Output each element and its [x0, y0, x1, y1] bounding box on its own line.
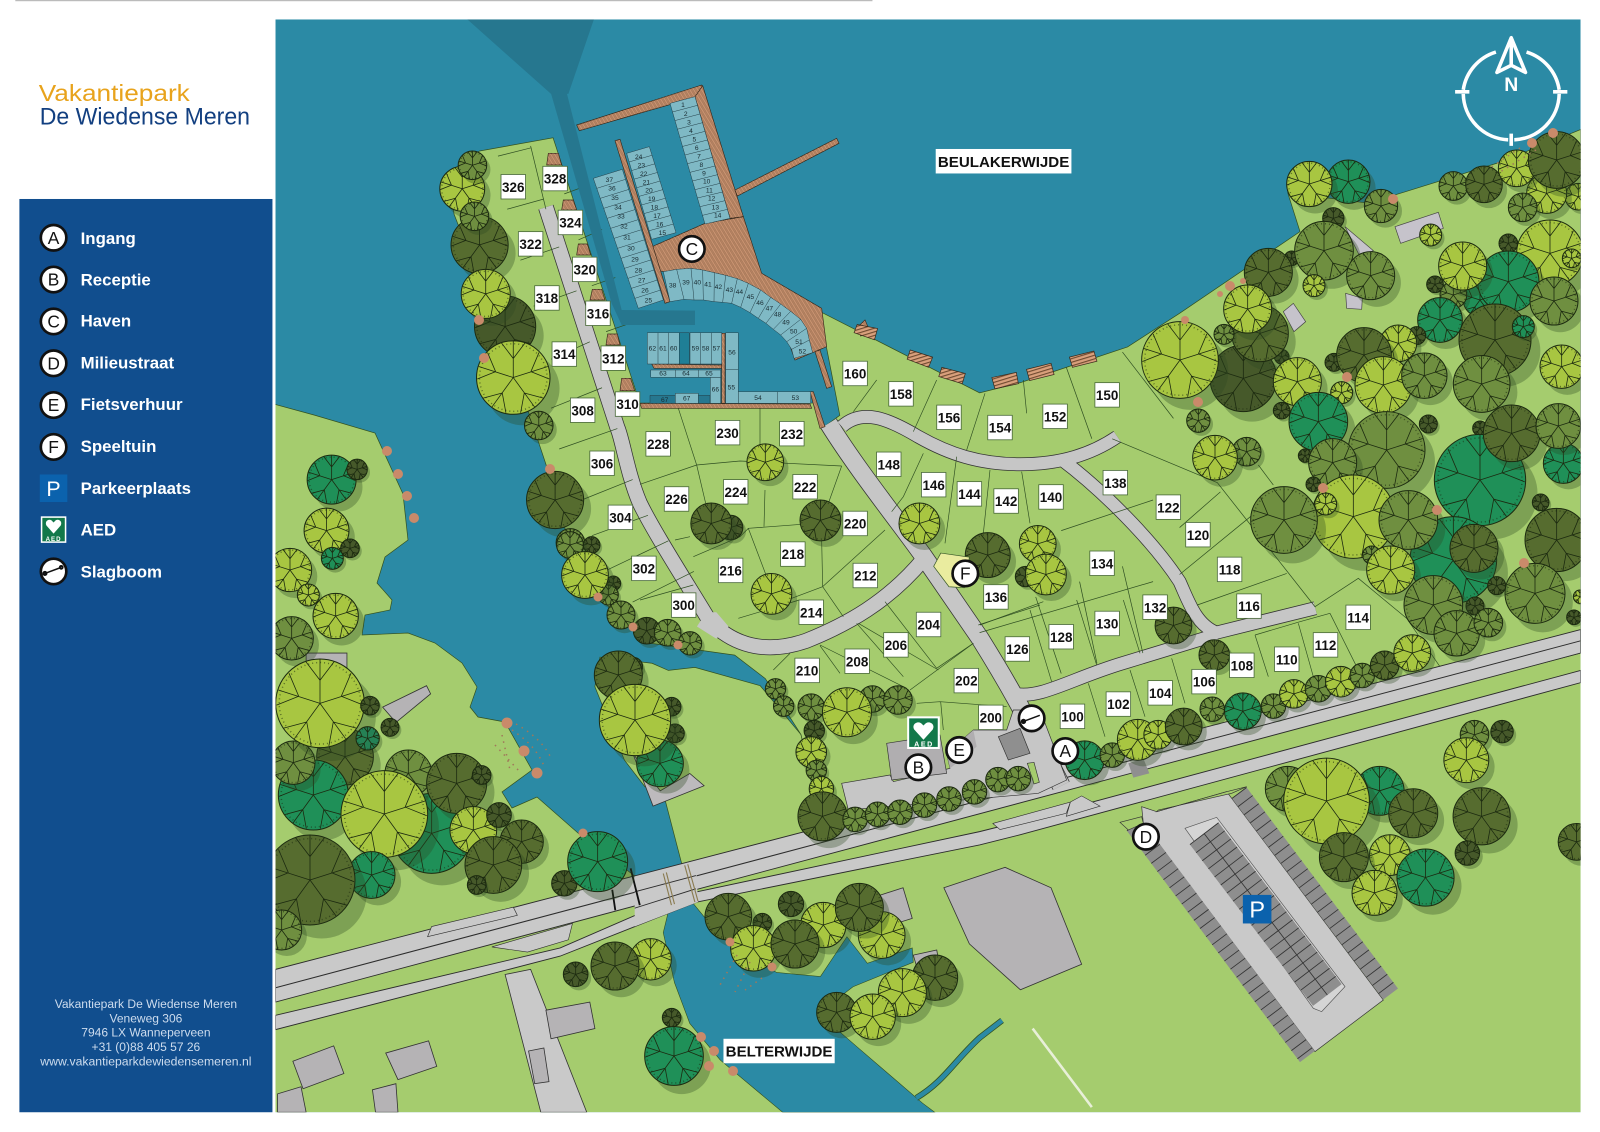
berth numbers: 67	[661, 397, 669, 404]
parking bays: north row	[1239, 793, 1391, 994]
lot numbers: 112	[1315, 638, 1336, 653]
building: large hall	[944, 867, 1082, 990]
side road and field buildings	[278, 653, 1082, 1112]
berth numbers: 51	[795, 339, 803, 346]
berth numbers: 43	[726, 287, 733, 294]
berth numbers: 46	[756, 300, 764, 307]
south water	[663, 903, 935, 1112]
lot numbers: 302	[633, 561, 655, 576]
contact details: 7946 LX Wanneperveen	[81, 1026, 211, 1040]
lot numbers: 122	[1157, 500, 1180, 515]
berths 38 to 52	[663, 268, 813, 358]
berth numbers: 40	[694, 279, 701, 286]
berth numbers: 20	[645, 188, 653, 195]
lot numbers: 102	[1107, 697, 1130, 712]
lot lines: centre	[640, 380, 1040, 677]
berth numbers: 39	[682, 280, 690, 287]
lot numbers: 208	[846, 654, 869, 669]
legend: Speeltuin	[41, 434, 156, 460]
reeds	[382, 128, 1558, 1076]
top scan edge	[15, 0, 872, 1]
berth numbers: 37	[606, 177, 613, 184]
lot numbers: 218	[782, 547, 805, 562]
channel shade	[550, 90, 695, 325]
contact details	[39, 997, 252, 1068]
lot numbers: 134	[1091, 556, 1114, 571]
marker: E bike rental: E	[953, 740, 965, 760]
marker: D environment street: D	[1140, 827, 1152, 847]
lot lines: south	[820, 600, 1185, 737]
legend: Parkeerplaats: Parkeerplaats	[81, 479, 191, 498]
berth numbers: 61	[659, 346, 667, 353]
lot numbers: 146	[922, 478, 945, 493]
legend: Receptie: Receptie	[81, 271, 151, 290]
lot numbers: 212	[854, 569, 877, 584]
label: Beulakerwijde: BEULAKERWIJDE	[938, 154, 1069, 171]
land: west shore	[270, 403, 640, 990]
trees: north-west strip	[440, 151, 591, 561]
roads: park	[546, 207, 1315, 786]
parking surface	[1142, 792, 1383, 1052]
marker: C harbour	[679, 236, 705, 262]
lot numbers: 202	[955, 674, 978, 689]
berth numbers: 49	[782, 320, 790, 327]
parking bays: centre	[1204, 833, 1327, 995]
lot numbers: 232	[781, 427, 803, 442]
berth numbers: 8	[699, 162, 703, 169]
berth numbers: 6	[695, 145, 699, 152]
berth numbers: 55	[728, 384, 735, 391]
lot numbers: 140	[1040, 490, 1062, 505]
berths 53 to 67	[647, 333, 811, 403]
logo line: Vakantiepark: Vakantiepark	[39, 80, 190, 106]
reed dots	[495, 148, 1536, 992]
bridge deck	[634, 875, 698, 926]
lot numbers: 312	[602, 351, 624, 366]
legend: Milieustraat	[41, 351, 175, 376]
berth numbers: 67	[683, 396, 691, 403]
lot numbers: 206	[885, 638, 907, 653]
lot numbers: 136	[985, 590, 1007, 605]
deep water bay	[467, 19, 594, 94]
berths 1 to 14	[670, 97, 730, 224]
berth numbers: 17	[653, 213, 661, 220]
lot numbers: 322	[519, 237, 542, 252]
marker: F playground	[953, 561, 978, 586]
berth numbers: 10	[703, 179, 711, 186]
berth numbers: 13	[712, 204, 719, 211]
field path	[1033, 1029, 1092, 1107]
lot numbers: 214	[800, 605, 823, 620]
land: park south bank	[594, 656, 811, 864]
road side strips	[428, 796, 1100, 952]
lot numbers: 318	[536, 291, 559, 306]
trees: upper west land	[304, 455, 370, 560]
lot numbers: 308	[571, 403, 594, 418]
berth numbers: 63	[659, 371, 667, 378]
berth numbers: 41	[704, 281, 712, 288]
lot numbers: 228	[647, 437, 670, 452]
berth numbers: 45	[747, 294, 754, 301]
trees: eastern woodland north	[1142, 132, 1595, 422]
berth numbers: 16	[656, 222, 664, 229]
lot numbers: 120	[1187, 528, 1209, 543]
legend: Ingang	[41, 225, 136, 251]
water	[276, 19, 1581, 1112]
lot numbers: 160	[844, 367, 866, 382]
berths 25 to 37	[593, 169, 663, 308]
land: holiday park	[449, 130, 1581, 852]
berth numbers: 24	[635, 154, 643, 161]
berth numbers: 42	[715, 284, 722, 291]
lot numbers: 304	[609, 510, 632, 525]
marker: F playground: F	[960, 564, 971, 584]
trees: park south	[765, 607, 1435, 848]
lot numbers: 316	[587, 306, 609, 321]
lot numbers: 204	[917, 618, 940, 633]
berth numbers: 27	[638, 277, 646, 284]
berth numbers: 19	[648, 196, 656, 203]
lot numbers: 138	[1104, 476, 1127, 491]
lot numbers: 132	[1144, 600, 1166, 615]
berth numbers: 23	[638, 162, 645, 169]
berth numbers: 2	[684, 111, 688, 118]
marker: A entrance	[1053, 738, 1078, 764]
legend: Fietsverhuur	[41, 392, 183, 418]
contact details: +31 (0)88 405 57 26	[92, 1040, 201, 1054]
compass	[1455, 38, 1567, 146]
lot numbers: 324	[559, 216, 582, 231]
berth numbers: 33	[617, 214, 625, 221]
legend: Speeltuin: F	[48, 437, 59, 457]
lot numbers: 118	[1219, 562, 1241, 577]
legend: Receptie	[41, 267, 151, 292]
marker: parking: P	[1249, 896, 1265, 922]
berth numbers: 31	[623, 235, 631, 242]
legend: Milieustraat: D	[47, 353, 60, 373]
berth numbers: 66	[712, 387, 719, 394]
panel: legend	[19, 199, 272, 1112]
berth numbers: 14	[714, 213, 722, 220]
marker: barrier	[1019, 706, 1044, 731]
berth numbers: 58	[702, 346, 710, 353]
berth numbers: 11	[706, 187, 713, 194]
reception area	[820, 600, 1185, 810]
berth numbers: 3	[687, 119, 691, 126]
legend: Haven: C	[47, 312, 60, 332]
berth numbers: 4	[689, 128, 693, 135]
legend: Ingang: A	[48, 228, 60, 248]
berth numbers: 12	[708, 196, 716, 203]
berth numbers: 15	[659, 230, 666, 237]
berth numbers: 38	[669, 282, 677, 289]
berth numbers: 59	[692, 346, 699, 353]
timber decks	[577, 85, 839, 428]
lot numbers: 142	[995, 494, 1017, 509]
lot numbers: 150	[1096, 388, 1118, 403]
lot numbers: 110	[1276, 652, 1298, 667]
berth numbers: 28	[635, 267, 642, 274]
lot numbers: 148	[878, 457, 901, 472]
berth numbers: 1	[681, 102, 685, 109]
legend: Slagboom	[41, 559, 162, 584]
lot numbers: 104	[1149, 686, 1172, 701]
berth numbers: 65	[705, 371, 713, 378]
stream water	[916, 1020, 1002, 1098]
contact details: Veneweg 306	[109, 1011, 183, 1025]
compass: N	[1504, 74, 1518, 96]
lot numbers: 126	[1006, 642, 1029, 657]
berth numbers: 36	[608, 185, 616, 192]
marker: E bike rental	[946, 737, 972, 763]
lot numbers: 320	[573, 262, 596, 277]
label: Belterwijde: BELTERWIJDE	[726, 1044, 832, 1061]
berth numbers: 30	[627, 246, 635, 253]
legend: Slagboom: Slagboom	[81, 563, 162, 582]
trees: by parking	[1265, 720, 1600, 922]
roads: main road	[276, 630, 1581, 1030]
berth numbers: 7	[697, 154, 701, 161]
berth numbers: 32	[620, 224, 628, 231]
legend: Fietsverhuur: Fietsverhuur	[81, 395, 183, 414]
lot numbers: 128	[1050, 630, 1073, 645]
logo line: De Wiedense Meren: De Wiedense Meren	[40, 103, 250, 130]
berth numbers: 44	[736, 289, 743, 296]
lot numbers: 224	[724, 485, 747, 500]
berth numbers: 47	[766, 306, 773, 313]
berth numbers: 29	[631, 257, 639, 264]
berth numbers: 35	[611, 195, 619, 202]
legend: Milieustraat: Milieustraat	[81, 353, 175, 372]
berth numbers: 25	[645, 297, 652, 304]
berth numbers	[606, 102, 806, 404]
berth numbers: 26	[641, 287, 649, 294]
berth numbers: 48	[774, 312, 782, 319]
legend: Receptie: B	[48, 270, 59, 290]
legend: Parkeerplaats: P	[46, 477, 61, 501]
legend: Speeltuin: Speeltuin	[81, 437, 156, 456]
lot numbers: 222	[794, 480, 816, 495]
north shore jetties	[854, 324, 1097, 389]
contact details: www.vakantieparkdewiedensemeren.nl	[39, 1054, 252, 1068]
lot numbers: 116	[1238, 599, 1260, 614]
building: reception	[887, 735, 947, 780]
lot numbers: 200	[980, 710, 1002, 725]
lot numbers: 154	[989, 421, 1012, 436]
shore jetties	[547, 153, 870, 391]
label: Belterwijde	[723, 1039, 835, 1063]
berth numbers: 57	[713, 346, 720, 353]
lot numbers: 220	[844, 517, 866, 532]
lot numbers	[501, 166, 1370, 730]
lot numbers: 158	[890, 387, 913, 402]
lot numbers: 106	[1193, 675, 1215, 690]
contact details: Vakantiepark De Wiedense Meren	[55, 997, 237, 1011]
lot numbers: 306	[591, 456, 613, 471]
berth numbers: 52	[799, 349, 806, 356]
marker: AED: AED	[914, 740, 934, 748]
berths 15 to 24	[627, 147, 676, 239]
legend: Parkeerplaats	[40, 474, 191, 502]
legend: Haven: Haven	[81, 312, 131, 331]
lot lines: far east	[1255, 465, 1440, 677]
playground	[934, 553, 969, 588]
marker: A entrance: A	[1060, 741, 1072, 761]
lot numbers: 156	[938, 410, 960, 425]
legend: AED: AED	[46, 536, 62, 543]
berth numbers: 62	[649, 346, 656, 353]
berth numbers: 64	[682, 371, 690, 378]
parking bays: south row	[1134, 825, 1307, 1057]
lot numbers: 210	[796, 664, 818, 679]
logo	[39, 80, 250, 130]
marker: C harbour: C	[686, 239, 698, 259]
marker: parking	[1243, 895, 1271, 923]
lot numbers: 326	[502, 180, 524, 195]
label: Beulakerwijde	[936, 149, 1071, 173]
berth numbers: 21	[643, 180, 650, 187]
lot numbers: 144	[958, 487, 981, 502]
lot numbers: 108	[1231, 658, 1254, 673]
lot numbers: 230	[716, 426, 739, 441]
marker: B reception	[906, 755, 931, 780]
legend: Fietsverhuur: E	[48, 395, 59, 415]
legend: AED: AED	[81, 521, 116, 540]
trees: west land and canal	[262, 532, 705, 956]
land: south of road	[276, 653, 1581, 1112]
lot numbers: 216	[719, 564, 742, 579]
lot numbers: 100	[1061, 709, 1084, 724]
lot numbers: 130	[1096, 617, 1118, 632]
berth numbers: 53	[792, 395, 799, 402]
berth numbers: 56	[728, 350, 736, 357]
berth numbers: 34	[614, 205, 622, 212]
berth numbers: 9	[702, 170, 706, 177]
lot numbers: 152	[1044, 409, 1066, 424]
marina	[547, 85, 870, 428]
lot numbers: 314	[553, 347, 576, 362]
marker: D environment street	[1133, 824, 1159, 849]
berth numbers: 22	[640, 171, 648, 178]
marker: AED	[907, 716, 940, 749]
trees: eastern woodland south	[1187, 392, 1597, 663]
parking	[1120, 787, 1391, 1057]
lot numbers: 300	[672, 598, 695, 613]
berth numbers: 50	[790, 329, 798, 336]
parking island	[1185, 817, 1345, 1012]
berth numbers: 54	[754, 395, 762, 402]
east woodland cabins	[1283, 212, 1443, 332]
lot lines: strip and east	[498, 146, 1315, 673]
berth numbers: 18	[651, 204, 658, 211]
stream	[916, 1020, 1002, 1098]
lot numbers: 114	[1347, 610, 1370, 625]
lot numbers: 310	[616, 397, 639, 412]
legend: Ingang: Ingang	[81, 229, 136, 248]
berth numbers: 60	[670, 346, 678, 353]
legend: AED	[41, 516, 116, 543]
marker: B reception: B	[913, 757, 924, 777]
legend: Haven	[41, 309, 131, 334]
lot numbers: 328	[544, 172, 567, 187]
lot numbers: 226	[665, 492, 688, 507]
berth numbers: 5	[692, 136, 696, 143]
trees: south water	[563, 883, 964, 1094]
trees: park interior	[691, 444, 1072, 620]
